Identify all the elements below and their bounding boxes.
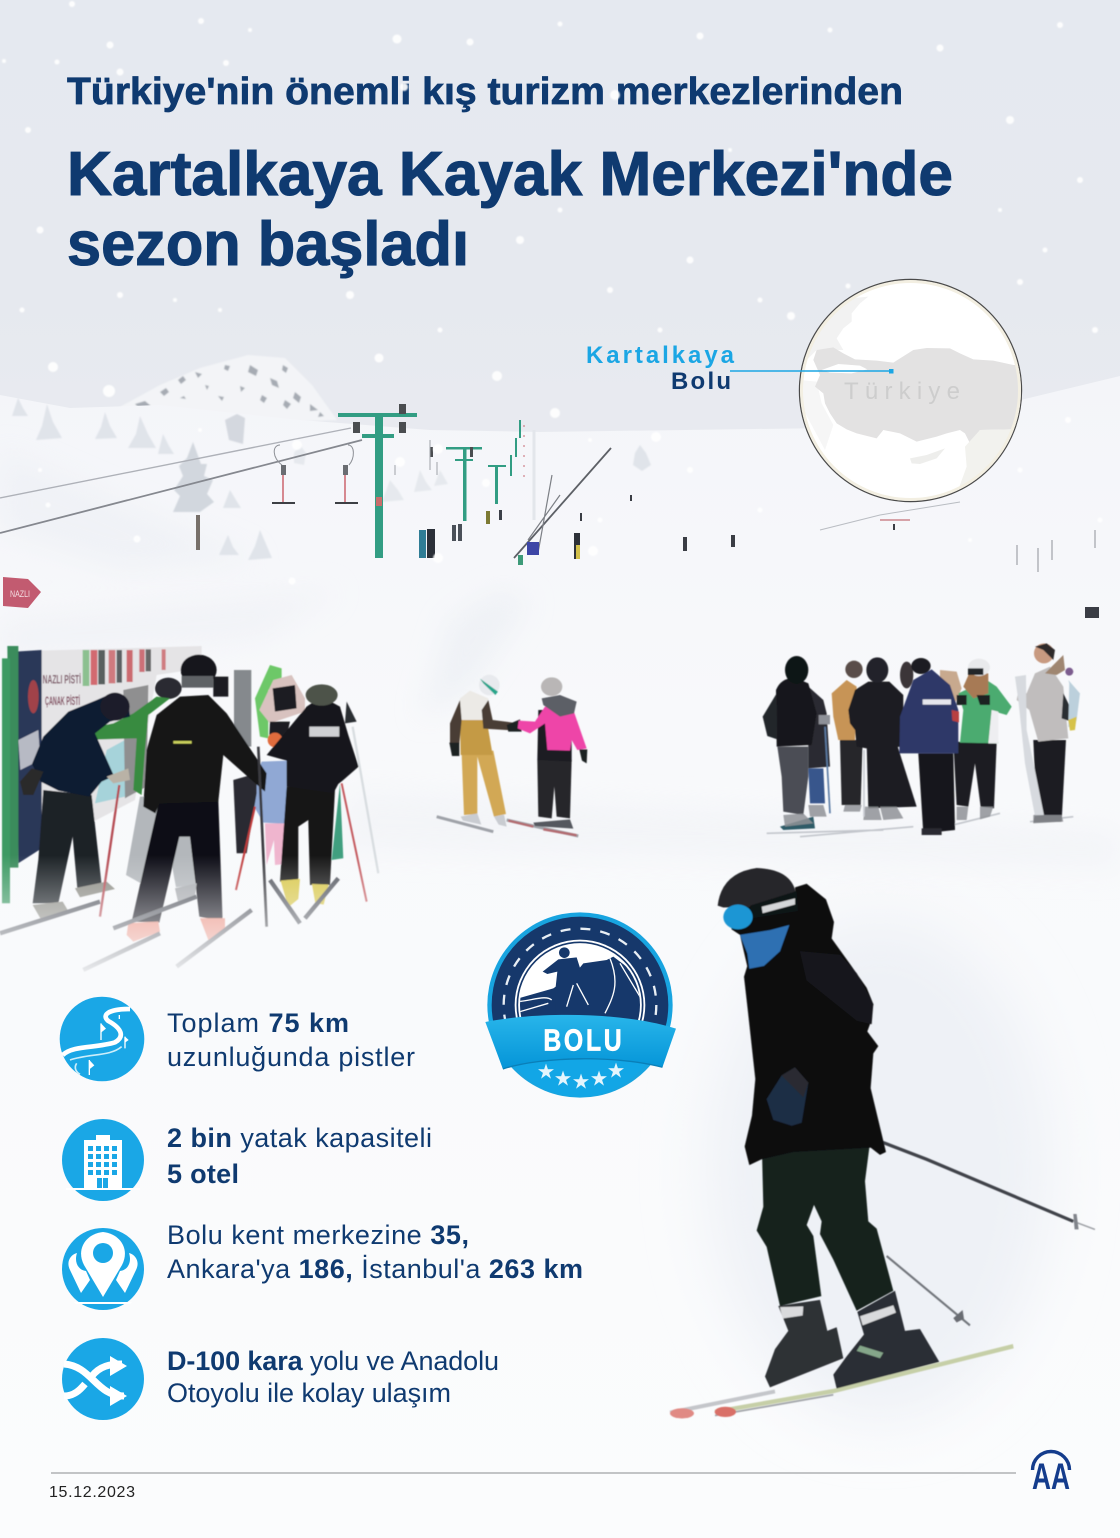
helmet xyxy=(718,868,796,907)
T-bar lifts xyxy=(272,440,437,503)
badge label: BOLU xyxy=(543,1023,622,1057)
title xyxy=(67,71,953,279)
icon: hotel building xyxy=(62,1119,144,1201)
text: hotel capacity: 2 bin yatak kapasiteli xyxy=(167,1123,432,1153)
fact: road access xyxy=(62,1338,499,1420)
skier in grey trousers xyxy=(126,797,195,887)
goggles xyxy=(723,905,753,929)
fact: hotels: 5 otel xyxy=(167,1159,239,1189)
ski poles and skis xyxy=(100,785,119,917)
badge stars: ★ xyxy=(607,1060,625,1083)
red piste sign: NAZLI xyxy=(10,589,30,599)
Bolu badge xyxy=(485,912,676,1098)
skier in black jacket, centre xyxy=(132,800,223,923)
background: mountain rock xyxy=(118,355,337,422)
green patterned sleeve xyxy=(80,697,170,795)
map disc xyxy=(800,280,1022,502)
text: piste length: Toplam 75 km xyxy=(167,1008,349,1038)
map label: Türkiye xyxy=(844,378,960,405)
icon: location pins xyxy=(62,1228,144,1310)
text: distances: Bolu kent merkezine 35, xyxy=(167,1220,469,1250)
boots xyxy=(127,918,225,942)
background: snowy slopes xyxy=(0,376,1120,1538)
scarf xyxy=(740,925,789,969)
fact: road access: Otoyolu ile kolay ulaşım xyxy=(167,1378,451,1408)
map land xyxy=(803,297,1021,490)
boots xyxy=(765,1300,843,1387)
ski lift towers and cables xyxy=(0,404,521,558)
fact: ski slopes: uzunluğunda pistler xyxy=(167,1042,415,1072)
second drag lift and distant poles xyxy=(514,425,1095,572)
board posts xyxy=(7,646,18,868)
information board xyxy=(15,646,202,863)
skis xyxy=(670,1391,775,1413)
jacket xyxy=(744,884,886,1165)
badge ribbon xyxy=(485,1015,676,1068)
background: winter sky xyxy=(0,0,1120,480)
badge stars: ★ xyxy=(554,1068,572,1091)
trees on the slope xyxy=(12,398,651,560)
rear skier: green jacket xyxy=(255,665,282,738)
trousers xyxy=(757,1137,893,1311)
face and neck xyxy=(727,891,807,967)
distant skiers xyxy=(419,495,1099,618)
fact: ski slopes xyxy=(60,997,415,1081)
footer rule xyxy=(51,1472,1016,1474)
information board: NAZLI PİSTİ xyxy=(43,671,81,686)
agency logo xyxy=(1032,1452,1070,1497)
kid in floral jacket xyxy=(248,761,287,824)
fog over the left group's skis xyxy=(0,855,400,985)
information board: ÇANAK PİSTİ xyxy=(45,693,80,708)
skier in navy jacket xyxy=(33,790,102,903)
icon: winding piste xyxy=(60,997,144,1081)
fact: distances: Ankara'ya 186, İstanbul'a 263 km xyxy=(167,1253,583,1284)
badge stars: ★ xyxy=(590,1068,608,1091)
poles xyxy=(887,1256,970,1325)
photo: main skier xyxy=(670,868,1095,1418)
tree trunk xyxy=(196,515,200,550)
map rim xyxy=(802,282,1020,500)
glove xyxy=(767,1067,808,1126)
location callout: Bolu xyxy=(671,368,731,395)
location callout: Kartalkaya xyxy=(586,342,735,369)
goggle strap xyxy=(750,891,798,918)
facts list xyxy=(60,997,583,1420)
badge lower cap xyxy=(513,1058,647,1097)
photo: ticket board and skier group on the left xyxy=(0,646,378,970)
gate post xyxy=(234,670,251,747)
fact: hotels xyxy=(62,1119,432,1201)
ribbon shadow xyxy=(503,1058,663,1068)
text: road access: D-100 kara yolu ve Anadolu xyxy=(167,1346,499,1376)
skier with logo jacket, right xyxy=(280,787,335,885)
fact: distances xyxy=(62,1220,583,1310)
agency logo: AA xyxy=(1032,1456,1070,1497)
badge mountains and skier xyxy=(520,947,640,1020)
icon: crossing arrows xyxy=(62,1338,144,1420)
badge stars xyxy=(537,1060,625,1093)
title: Türkiye'nin önemli kış turizm merkezlerinden xyxy=(67,71,903,113)
photo: skier pair in the middle xyxy=(437,675,587,836)
slope shading xyxy=(0,450,1120,870)
title: sezon başladı xyxy=(67,210,469,279)
location callout xyxy=(586,342,894,395)
title: Kartalkaya Kayak Merkezi'nde xyxy=(67,140,953,209)
photo: group of skiers on the right xyxy=(763,643,1080,837)
snowflakes xyxy=(2,1,1102,584)
badge stars: ★ xyxy=(537,1060,555,1083)
snowy glow behind the main skier xyxy=(710,920,1050,1420)
locator map xyxy=(800,280,1027,503)
footer date: 15.12.2023 xyxy=(49,1484,135,1501)
badge stars: ★ xyxy=(572,1070,590,1093)
red piste sign xyxy=(3,577,41,608)
